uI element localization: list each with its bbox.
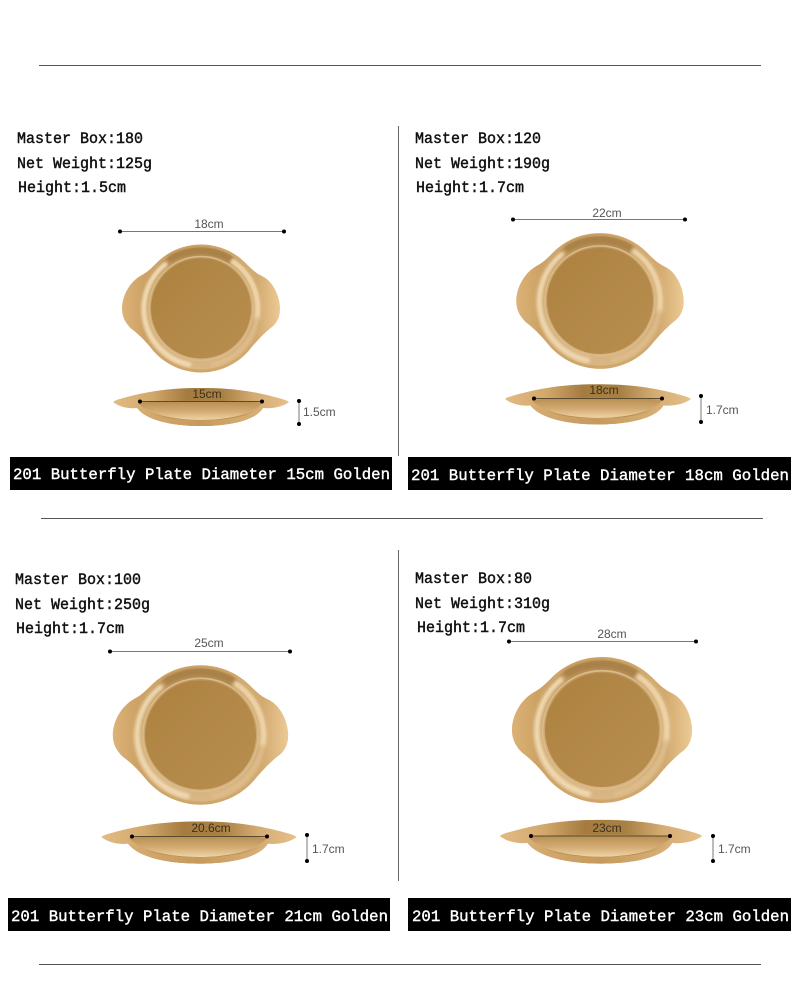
inner diameter dimension: 15cm: 15cm bbox=[192, 387, 222, 401]
specifications: 18cm plate: Master Box:120 bbox=[415, 130, 541, 148]
height dimension: 1.7cm: 1.7cm bbox=[312, 842, 345, 856]
product name banner: 18cm: 201 Butterfly Plate Diameter 18cm Golden bbox=[411, 467, 789, 485]
specifications: 23cm plate bbox=[415, 570, 550, 637]
product name banner: 21cm: 201 Butterfly Plate Diameter 21cm Golden bbox=[11, 908, 388, 926]
top view plate bbox=[512, 657, 692, 803]
side view plate bbox=[500, 820, 702, 864]
height dimension: 1.7cm bbox=[305, 833, 345, 863]
height dimension: 1.5cm: 1.5cm bbox=[303, 405, 336, 419]
specifications: 21cm plate: Master Box:100 bbox=[15, 571, 141, 589]
width dimension: 28cm bbox=[507, 627, 698, 644]
specifications: 23cm plate: Height:1.7cm bbox=[417, 619, 525, 637]
top view plate bbox=[122, 244, 280, 372]
specifications: 21cm plate: Height:1.7cm bbox=[16, 620, 124, 638]
specifications: 15cm plate: Master Box:180 bbox=[17, 130, 143, 148]
specifications: 18cm plate: Height:1.7cm bbox=[416, 179, 524, 197]
inner diameter dimension: 20.6cm: 20.6cm bbox=[191, 821, 231, 835]
inner diameter dimension: 23cm: 23cm bbox=[592, 821, 622, 835]
inner diameter dimension: 15cm bbox=[138, 387, 264, 404]
top view plate bbox=[516, 233, 684, 369]
product name banner: 23cm: 201 Butterfly Plate Diameter 23cm Golden bbox=[412, 908, 789, 926]
product name banner: 15cm bbox=[10, 457, 392, 490]
product name banner: 15cm: 201 Butterfly Plate Diameter 15cm Golden bbox=[13, 466, 390, 484]
specifications: 21cm plate: Net Weight:250g bbox=[15, 596, 150, 614]
inner diameter dimension: 18cm: 18cm bbox=[589, 383, 619, 397]
height dimension: 1.7cm: 1.7cm bbox=[706, 403, 739, 417]
panel: 18cm plate bbox=[408, 130, 791, 490]
panel: 23cm plate bbox=[408, 570, 791, 931]
product name banner: 21cm bbox=[8, 898, 390, 931]
height dimension: 1.7cm bbox=[711, 834, 751, 863]
width dimension: 28cm: 28cm bbox=[597, 627, 627, 641]
specifications: 23cm plate: Master Box:80 bbox=[415, 570, 532, 588]
width dimension: 22cm: 22cm bbox=[592, 206, 622, 220]
inner diameter dimension: 23cm bbox=[529, 821, 672, 838]
inner diameter dimension: 20.6cm bbox=[130, 821, 269, 838]
width dimension: 18cm bbox=[118, 217, 286, 234]
top view plate bbox=[113, 665, 288, 805]
panel: 15cm plate bbox=[10, 130, 392, 490]
specifications: 18cm plate bbox=[415, 130, 550, 197]
height dimension: 1.5cm bbox=[297, 399, 336, 426]
side view plate bbox=[101, 821, 297, 864]
product name banner: 23cm bbox=[408, 898, 791, 931]
specifications: 18cm plate: Net Weight:190g bbox=[415, 155, 550, 173]
width dimension: 18cm: 18cm bbox=[194, 217, 224, 231]
specifications: 23cm plate: Net Weight:310g bbox=[415, 595, 550, 613]
height dimension: 1.7cm: 1.7cm bbox=[718, 842, 751, 856]
side view plate bbox=[113, 388, 289, 426]
side view plate bbox=[505, 384, 691, 424]
height dimension: 1.7cm bbox=[699, 394, 739, 424]
specifications: 21cm plate bbox=[15, 571, 150, 638]
inner diameter dimension: 18cm bbox=[532, 383, 664, 400]
product name banner: 18cm bbox=[408, 457, 791, 490]
specifications: 15cm plate bbox=[17, 130, 152, 197]
specifications: 15cm plate: Net Weight:125g bbox=[17, 155, 152, 173]
panel: 21cm plate bbox=[8, 571, 390, 931]
specifications: 15cm plate: Height:1.5cm bbox=[18, 179, 126, 197]
width dimension: 22cm bbox=[511, 206, 687, 222]
width dimension: 25cm bbox=[108, 636, 292, 654]
width dimension: 25cm: 25cm bbox=[194, 636, 224, 650]
